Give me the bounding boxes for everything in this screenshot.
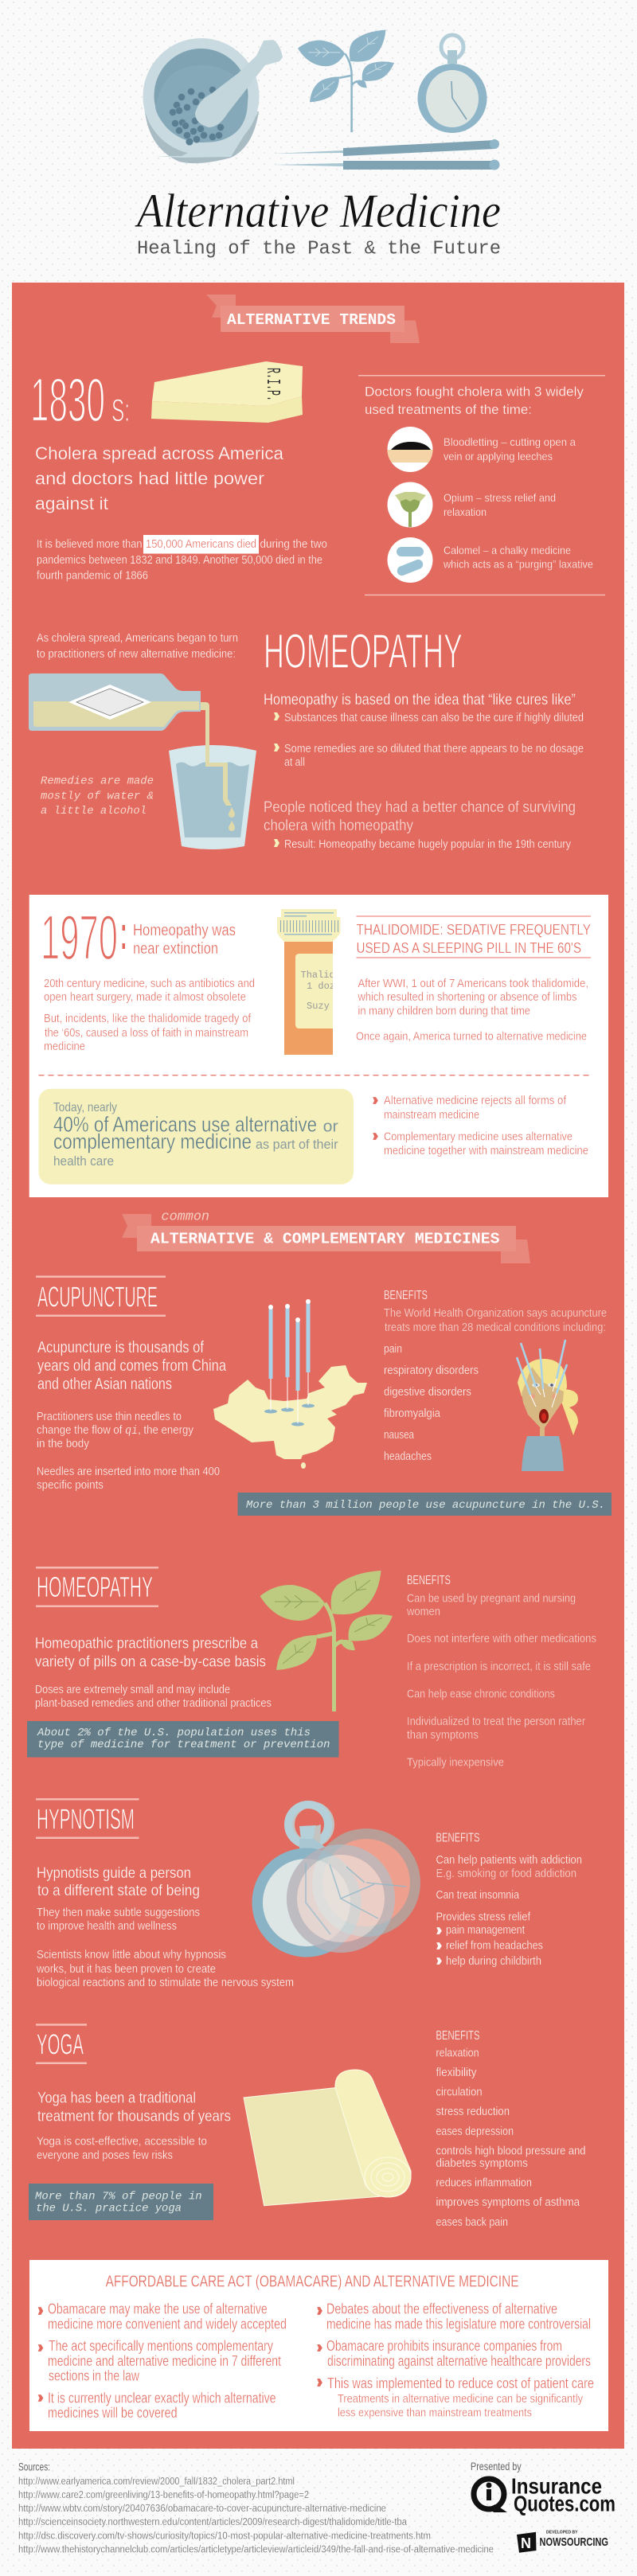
text: near extinction <box>133 922 236 958</box>
stat: 2 percent: type of medicine for treatment or prevention <box>37 1739 330 1751</box>
text: like cures like: cholera with homeopathy <box>264 818 413 834</box>
text: like cures like: Some remedies are so diluted that there appears to be no dosage <box>284 743 584 755</box>
section: yoga <box>29 2024 586 2229</box>
heading: yoga: YOGA <box>37 2028 84 2061</box>
text: who benefits <box>384 1289 607 1334</box>
heading: 1970: 1970 <box>41 902 118 973</box>
section: acupuncture <box>37 1277 612 1516</box>
text: thalidomide detail <box>356 978 588 1044</box>
illustration: swinging pocket watches <box>252 1805 420 1957</box>
list: homeopathy benefits: Can be used by pregnant and nursing <box>407 1592 576 1605</box>
heading: hypnotism <box>37 1799 139 1838</box>
text: hypnotists guide: Hypnotists guide a person <box>37 1865 191 1882</box>
stat: 2 percent: About 2% of the U.S. population uses this <box>37 1727 311 1739</box>
sources: http://scienceinsociety.northwestern.edu/content/articles/2009/research-digest/thalidomide/title-tba <box>18 2516 407 2527</box>
list: yoga benefits: controls high blood pressure and <box>436 2145 586 2158</box>
logo: nowsourcing <box>517 2531 608 2553</box>
note: remedies <box>41 775 154 818</box>
text: like cures like: Substances that cause illness can also be the cure if highly diluted <box>284 712 584 724</box>
text: acupuncture details <box>37 1411 220 1492</box>
illustration: woman with needles <box>517 1340 578 1471</box>
callout: 40 percent: 40% of Americans use alternative <box>53 1113 317 1137</box>
heading: homeopathy: HOMEOPATHY <box>264 624 463 678</box>
list: aca left column: medicine more convenient and widely accepted <box>48 2316 287 2332</box>
icon: pill bottle <box>277 909 341 1055</box>
text: yoga intro <box>37 2090 231 2125</box>
text: acupuncture details: change the flow of qi, the energy <box>37 1424 194 1438</box>
list: acupuncture conditions <box>384 1343 479 1463</box>
list: yoga benefits <box>436 2029 586 2229</box>
bullet chevrons <box>274 712 279 847</box>
text: opium <box>444 491 556 518</box>
icon: acupuncture needles <box>272 139 500 170</box>
ribbon heading: common medicines: common <box>161 1210 209 1225</box>
text: opium: Opium – stress relief and <box>444 491 556 504</box>
list: aca left column: It is currently unclear exactly which alternative <box>48 2391 276 2406</box>
list: aca right column: Treatments in alternative medicine can be significantly <box>338 2392 583 2406</box>
text: hypnotism details: They then make subtle suggestions <box>37 1907 200 1919</box>
subtitle: Healing of the Past & the Future <box>137 239 501 260</box>
list: alternative vs complementary: mainstream medicine <box>384 1109 479 1122</box>
sources: http://www.earlyamerica.com/review/2000_fall/1832_cholera_part2.html <box>18 2476 295 2487</box>
text: bloodletting: Bloodletting – cutting open a <box>444 435 576 448</box>
list: yoga benefits: eases depression <box>436 2125 514 2138</box>
list: aca left column: medicine and alternative medicine in 7 different <box>48 2353 281 2369</box>
stat: 7 percent: the U.S. practice yoga <box>36 2203 182 2215</box>
icon: bottle pouring into glass <box>29 673 256 849</box>
list: acupuncture conditions: digestive disorders <box>384 1386 471 1399</box>
text: who benefits: BENEFITS <box>384 1289 428 1302</box>
list: aca right column: less expensive than mainstream treatments <box>338 2406 532 2420</box>
text: calomel: Calomel – a chalky medicine <box>444 544 571 556</box>
text: like cures like <box>264 692 584 851</box>
callout: 40 percent: as part of their <box>256 1137 338 1152</box>
list: homeopathy benefits: Individualized to treat the person rather <box>407 1715 585 1728</box>
panel: 1830s <box>30 361 605 595</box>
sources: http://dsc.discovery.com/tv-shows/curiosity/topics/10-most-popular-alternative-medicine-treatments.htm <box>18 2531 431 2542</box>
text: thalidomide detail: in many children born during that time <box>358 1005 530 1018</box>
section: hypnotism <box>36 1799 582 1989</box>
list: homeopathy benefits <box>406 1574 596 1770</box>
text: doctors fought cholera: Doctors fought cholera with 3 widely <box>365 384 584 400</box>
text: thalidomide heading <box>357 915 591 958</box>
list: yoga benefits: reduces inflammation <box>436 2177 532 2190</box>
ribbon heading: alternative trends <box>206 295 420 343</box>
text: 20th century medicine: medicine <box>44 1040 85 1053</box>
text: thalidomide heading: USED AS A SLEEPING PILL IN THE 60'S <box>357 940 581 956</box>
logo: insurancequotes: Insurance <box>511 2474 602 2499</box>
text: opium: relaxation <box>444 505 487 518</box>
text: hypnotism details: biological reactions and to stimulate the nervous system <box>37 1977 294 1989</box>
text: doses: plant-based remedies and other traditional practices <box>35 1697 272 1710</box>
icon: mortar and pestle <box>143 38 283 163</box>
text: hypnotism details <box>36 1907 294 1989</box>
text: homeopathic practitioners: Homeopathic practitioners prescribe a <box>35 1636 258 1653</box>
callout: 40 percent: complementary medicine <box>53 1130 252 1153</box>
list: hypnotism benefits: BENEFITS <box>436 1832 479 1845</box>
text: like cures like: Homeopathy is based on the idea that “like cures like” <box>264 692 576 708</box>
text: calomel: which acts as a “purging” laxative <box>443 558 593 571</box>
note: remedies: a little alcohol <box>41 805 147 818</box>
text: near extinction: near extinction <box>133 940 218 958</box>
list: alternative vs complementary: medicine together with mainstream medicine <box>384 1145 588 1157</box>
stat: 2 percent <box>27 1721 339 1758</box>
list: yoga benefits: diabetes symptoms <box>436 2157 528 2170</box>
text: homeopathic practitioners <box>35 1636 266 1671</box>
text: acupuncture intro <box>37 1339 227 1393</box>
text: 20th century medicine: the ‘60s, caused a loss of faith in mainstream <box>45 1027 248 1040</box>
list: aca right column: Obamacare prohibits insurance companies from <box>326 2338 562 2354</box>
list: aca left column <box>38 2301 287 2421</box>
text: as cholera spread: As cholera spread, Americans began to turn <box>37 632 238 645</box>
text: yoga intro: treatment for thousands of years <box>37 2109 231 2125</box>
text: bloodletting <box>444 435 576 463</box>
icon: pill bottle: Suzy Q. <box>307 1001 346 1012</box>
list: yoga benefits: circulation <box>436 2086 483 2099</box>
text: calomel <box>443 544 593 571</box>
text: cholera spread <box>35 443 284 513</box>
list: yoga benefits: relaxation <box>436 2047 479 2059</box>
text: who benefits: The World Health Organization says acupuncture <box>384 1307 607 1320</box>
list: aca left column: sections in the law <box>49 2368 140 2384</box>
text: like cures like: at all <box>284 756 305 769</box>
text: as cholera spread: to practitioners of new alternative medicine: <box>37 648 236 661</box>
sources: http://www.care2.com/greenliving/13-benefits-of-homeopathy.html?page=2 <box>18 2489 309 2500</box>
credit: presented by: Presented by <box>471 2460 522 2473</box>
list: homeopathy benefits: Does not interfere with other medications <box>407 1633 596 1645</box>
icon: opium poppy <box>387 482 433 527</box>
logo: insurancequotes <box>474 2474 616 2516</box>
icon: bloodletting <box>387 427 433 472</box>
text: yoga details: everyone and poses few risks <box>37 2149 173 2162</box>
illustration: yoga mat <box>244 2070 411 2206</box>
list: acupuncture conditions: nausea <box>384 1429 415 1442</box>
sources <box>18 2460 494 2555</box>
text: cholera spread: against it <box>35 494 108 513</box>
text: hypnotists guide: to a different state of being <box>37 1883 200 1899</box>
sources: Sources: <box>18 2460 50 2473</box>
list: hypnotism benefits: help during childbirth <box>446 1955 541 1968</box>
panel: affordable care act <box>29 2260 608 2431</box>
list: acupuncture conditions: fibromyalgia <box>384 1407 441 1420</box>
text: like cures like: Result: Homeopathy became hugely popular in the 19th century <box>284 838 572 851</box>
heading: homeopathy: HOMEOPATHY <box>37 1571 153 1603</box>
text: hypnotism details: to improve health and wellness <box>37 1920 177 1933</box>
section: homeopathy <box>27 1567 596 1770</box>
text: hypnotists guide <box>37 1865 200 1899</box>
icon: pill bottle: 1 dozen <box>307 981 346 992</box>
text: acupuncture details: Needles are inserted into more than 400 <box>37 1466 220 1478</box>
text: acupuncture intro: Acupuncture is thousands of <box>37 1339 204 1356</box>
list: aca left column: The act specifically mentions complementary <box>49 2338 273 2354</box>
title: Alternative Medicine <box>134 185 501 237</box>
text: acupuncture intro: years old and comes from China <box>37 1357 227 1375</box>
stat: 3 million: More than 3 million people use acupuncture in the U.S. <box>246 1499 605 1512</box>
list: homeopathy benefits: If a prescription is incorrect, it is still safe <box>407 1661 591 1673</box>
list: hypnotism benefits: Provides stress relief <box>436 1911 531 1923</box>
stat: 7 percent: More than 7% of people in <box>35 2191 202 2203</box>
list: hypnotism benefits: Can treat insomnia <box>436 1889 520 1902</box>
logo: nowsourcing: N <box>521 2535 531 2551</box>
list: yoga benefits: flexibility <box>436 2067 477 2079</box>
list: yoga benefits: stress reduction <box>436 2106 510 2118</box>
text: homeopathic practitioners: variety of pills on a case-by-case basis <box>35 1654 266 1671</box>
icon: calomel pills <box>387 537 433 583</box>
list: aca right column: Debates about the effectiveness of alternative <box>326 2301 557 2317</box>
ribbon heading: alternative trends: ALTERNATIVE TRENDS <box>227 311 396 329</box>
stat: 7 percent <box>29 2184 213 2220</box>
list: hypnotism benefits: Can help patients with addiction <box>436 1854 582 1867</box>
sources: http://www.thehistorychannelclub.com/articles/articletype/articleview/articleid/349/the-fall-and-rise-of-alternative-medicine <box>18 2544 494 2555</box>
text: doctors fought cholera: used treatments of the time: <box>365 402 532 417</box>
panel: homeopathy rise <box>29 624 584 851</box>
text: 20th century medicine: 20th century medicine, such as antibiotics and <box>44 978 255 990</box>
text: 20th century medicine: open heart surgery, made it almost obsolete <box>44 991 246 1004</box>
list: yoga benefits: BENEFITS <box>436 2029 479 2043</box>
text: acupuncture details: specific points <box>37 1479 104 1492</box>
list: aca left column: Obamacare may make the use of alternative <box>48 2301 268 2317</box>
icon: coffin <box>151 361 303 423</box>
text: thalidomide detail: After WWI, 1 out of 7 Americans took thalidomide, <box>358 978 588 990</box>
list: alternative vs complementary <box>373 1095 588 1157</box>
text: acupuncture details: Practitioners use thin needles to <box>37 1411 182 1423</box>
text: doses: Doses are extremely small and may include <box>35 1684 230 1696</box>
list: homeopathy benefits: Can help ease chronic conditions <box>407 1688 555 1700</box>
text: as cholera spread <box>37 632 238 661</box>
text: like cures like: People noticed they had a better chance of surviving <box>264 799 576 816</box>
list: homeopathy benefits: Typically inexpensive <box>407 1757 504 1770</box>
list: homeopathy benefits: than symptoms <box>407 1729 479 1742</box>
illustration: china map with needles <box>213 1299 367 1469</box>
heading: yoga <box>37 2024 86 2063</box>
text: thalidomide detail: which resulted in shortening or absence of limbs <box>358 991 576 1004</box>
sources: http://www.wbtv.com/story/20407636/obamacare-to-cover-acupuncture-alternative-medicine <box>18 2503 386 2514</box>
list: acupuncture conditions: pain <box>384 1343 402 1356</box>
heading: acupuncture: ACUPUNCTURE <box>37 1281 158 1313</box>
heading: 1830s: S: <box>111 393 130 428</box>
note: remedies: Remedies are made <box>41 775 154 788</box>
icon: pill bottle: Thalidomide <box>301 970 364 981</box>
list: hypnotism benefits: relief from headaches <box>446 1940 543 1953</box>
text: yoga intro: Yoga has been a traditional <box>37 2090 196 2107</box>
list: hypnotism benefits: E.g. smoking or food addiction <box>436 1868 576 1880</box>
text: acupuncture details: in the body <box>37 1438 90 1450</box>
text: death toll <box>37 535 327 583</box>
text: death toll: pandemics between 1832 and 1849. Another 50,000 died in the <box>37 554 322 567</box>
logo: nowsourcing: NOWSOURCING <box>540 2535 608 2549</box>
ribbon heading: common medicines: ALTERNATIVE & COMPLEMENTARY MEDICINES <box>150 1231 500 1248</box>
text: thalidomide heading: THALIDOMIDE: SEDATIVE FREQUENTLY <box>357 922 591 938</box>
list: acupuncture conditions: headaches <box>384 1450 432 1463</box>
heading: aca: AFFORDABLE CARE ACT (OBAMACARE) AND ALTERNATIVE MEDICINE <box>106 2274 519 2291</box>
text: bloodletting: vein or applying leeches <box>444 450 553 463</box>
text: thalidomide detail: Once again, America turned to alternative medicine <box>356 1031 587 1044</box>
list: alternative vs complementary: Complementary medicine uses alternative <box>384 1131 573 1144</box>
callout: 40 percent: or <box>323 1118 338 1136</box>
text: death toll: during the two <box>260 538 327 551</box>
stat: 3 million <box>237 1493 612 1516</box>
list: yoga benefits: eases back pain <box>436 2216 508 2229</box>
text: yoga details: Yoga is cost-effective, accessible to <box>37 2136 207 2149</box>
text: cholera spread: and doctors had little power <box>35 469 264 489</box>
text: death toll: 150,000 Americans died <box>146 538 256 551</box>
text: doses <box>35 1684 272 1710</box>
text: hypnotism details: works, but it has been proven to create <box>36 1963 216 1976</box>
icon: stopwatch <box>417 35 487 133</box>
heading: 1830s: 1830 <box>30 365 105 435</box>
icon: plant <box>298 30 394 132</box>
panel: 1970 white box <box>29 895 608 1197</box>
list: aca right column <box>317 2301 594 2420</box>
list: acupuncture conditions: respiratory disorders <box>384 1364 479 1377</box>
list: hypnotism benefits: pain management <box>446 1924 525 1937</box>
icon: green plant <box>260 1571 393 1711</box>
callout: 40 percent: health care <box>53 1153 114 1169</box>
panel: treatments of the time <box>358 375 605 595</box>
logo: nowsourcing: DEVELOPED BY <box>546 2531 578 2535</box>
heading: 1970 <box>41 902 125 973</box>
list: hypnotism benefits <box>436 1832 582 1968</box>
text: hypnotism details: Scientists know little about why hypnosis <box>37 1949 226 1961</box>
list: yoga benefits: improves symptoms of asthma <box>436 2196 580 2209</box>
note: remedies: mostly of water & <box>41 790 154 803</box>
text: 20th century medicine: But, incidents, like the thalidomide tragedy of <box>44 1013 252 1025</box>
list: alternative vs complementary: Alternative medicine rejects all forms of <box>384 1095 567 1107</box>
list: homeopathy benefits: women <box>406 1606 440 1618</box>
icon: coffin: R.I.P. <box>261 368 283 401</box>
text: death toll: fourth pandemic of 1866 <box>37 570 148 583</box>
text: who benefits: treats more than 28 medical conditions including: <box>385 1321 606 1334</box>
list: aca left column: medicines will be covered <box>48 2405 177 2421</box>
text: acupuncture intro: and other Asian nations <box>37 1376 172 1393</box>
ribbon heading: common medicines <box>122 1210 530 1263</box>
callout: 40 percent: Today, nearly <box>53 1101 117 1114</box>
text: cholera spread: Cholera spread across America <box>35 443 284 463</box>
list: homeopathy benefits: BENEFITS <box>407 1574 451 1587</box>
text: near extinction: Homeopathy was <box>133 922 236 939</box>
heading: hypnotism: HYPNOTISM <box>37 1802 135 1836</box>
text: 20th century medicine <box>44 978 255 1053</box>
text: death toll: It is believed more than <box>37 538 142 551</box>
text: yoga details <box>37 2136 207 2162</box>
text: doctors fought cholera <box>365 384 584 417</box>
callout: 40 percent <box>38 1089 354 1185</box>
